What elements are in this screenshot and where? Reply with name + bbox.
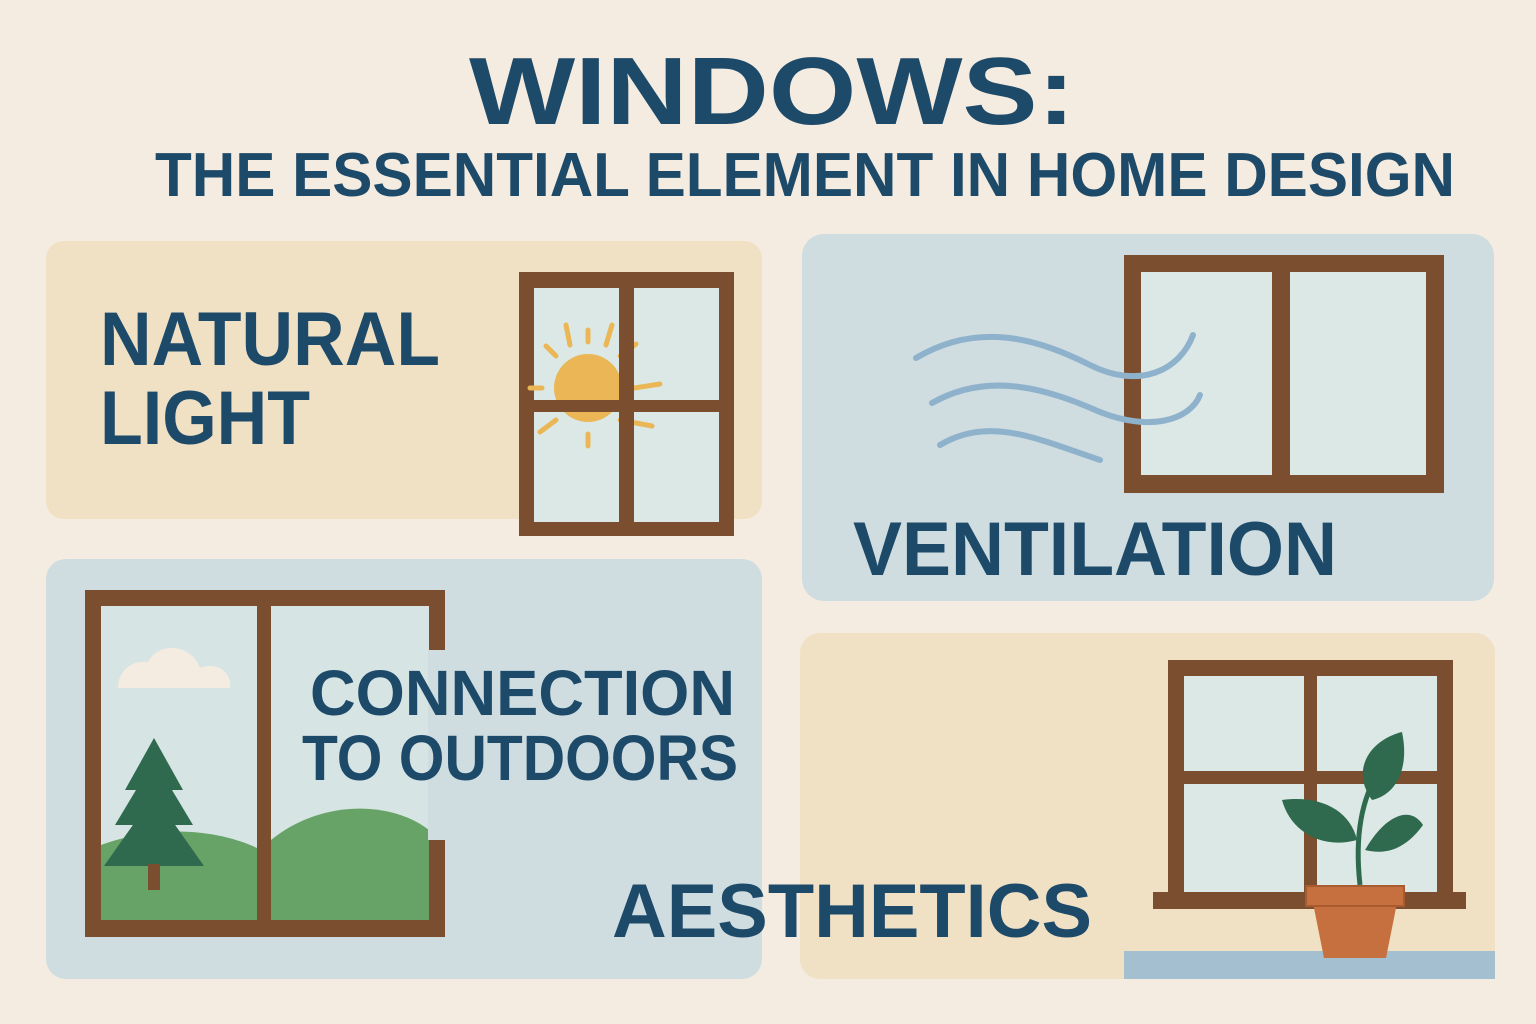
heading: natural light: NATURAL bbox=[100, 297, 440, 382]
heading: natural light bbox=[100, 297, 440, 461]
panel: ventilation bbox=[802, 234, 1494, 601]
heading: connection to outdoors: CONNECTION bbox=[310, 657, 735, 729]
icon: window with landscape bbox=[85, 590, 446, 937]
panel: natural light bbox=[46, 241, 762, 536]
heading: aesthetics: AESTHETICS bbox=[612, 869, 1092, 954]
heading: ventilation: VENTILATION bbox=[853, 507, 1337, 592]
subtitle: THE ESSENTIAL ELEMENT IN HOME DESIGN bbox=[155, 141, 1455, 210]
icon: window with sun bbox=[519, 272, 734, 536]
heading: connection to outdoors bbox=[302, 657, 738, 794]
icon: wind lines bbox=[916, 335, 1200, 460]
heading: connection to outdoors: TO OUTDOORS bbox=[302, 722, 738, 794]
icon: open window bbox=[1124, 255, 1444, 493]
heading: natural light: LIGHT bbox=[100, 376, 310, 461]
panel: aesthetics bbox=[612, 633, 1495, 979]
panel: connection to outdoors bbox=[46, 559, 762, 979]
blue floor strip bbox=[1124, 951, 1495, 979]
icon: window with plant bbox=[1153, 660, 1466, 958]
title: WINDOWS: bbox=[469, 38, 1075, 145]
